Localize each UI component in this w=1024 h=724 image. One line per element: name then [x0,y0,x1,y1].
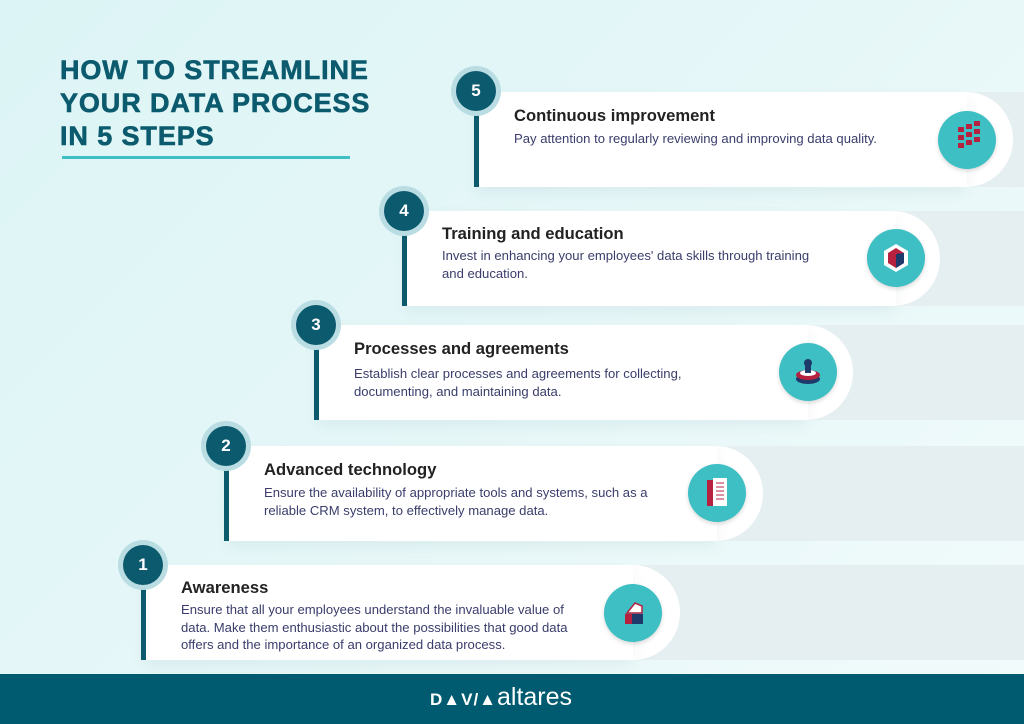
step 3 [291,300,1024,424]
text 1: data. Make them enthusiastic about the possibilities that good data [181,620,568,634]
text 4: Invest in enhancing your employees' data skills through training [442,248,809,263]
title: HOW TO STREAMLINE [60,55,369,85]
heading 4: Training and education [442,224,624,243]
title: IN 5 STEPS [60,121,215,151]
number 3 [296,305,336,345]
text 3: documenting, and maintaining data. [354,384,561,398]
text 2: reliable CRM system, to effectively manage data. [264,502,548,518]
step 4 [379,186,1024,310]
text 2: Ensure the availability of appropriate tools and systems, such as a [264,485,648,500]
step 5 [451,66,1024,191]
icon 3 [779,343,837,401]
text 2 [264,485,648,518]
step 1 [118,540,1024,664]
text 4: and education. [442,266,528,280]
icon 2 [688,464,746,522]
number 2: 2 [221,436,231,455]
icon 4 [867,229,925,287]
text 5: Pay attention to regularly reviewing and improving data quality. [514,131,877,146]
number 1 [123,545,163,585]
text 1: offers and the importance of an organized data process. [181,637,505,652]
icon 1 [604,584,662,642]
number 4 [384,191,424,231]
text 1: Ensure that all your employees understand the invaluable value of [181,602,564,617]
number 4: 4 [399,201,409,220]
number 5 [456,71,496,111]
number 5: 5 [471,81,481,100]
number 2 [206,426,246,466]
text 4 [442,248,809,280]
heading 2: Advanced technology [264,460,436,479]
step 2 [201,421,1024,545]
heading 5: Continuous improvement [514,106,715,125]
number 1: 1 [138,555,148,574]
title: YOUR DATA PROCESS [60,88,370,118]
text 1 [181,602,568,652]
number 3: 3 [311,315,321,334]
heading 1: Awareness [181,578,268,597]
title [60,55,370,151]
text 3: Establish clear processes and agreements for collecting, [354,366,682,381]
icon 5 [938,111,996,169]
footer [0,674,1024,724]
heading 3: Processes and agreements [354,339,569,358]
logo: D▲V/▲altares [430,683,572,711]
text 3 [354,366,682,398]
